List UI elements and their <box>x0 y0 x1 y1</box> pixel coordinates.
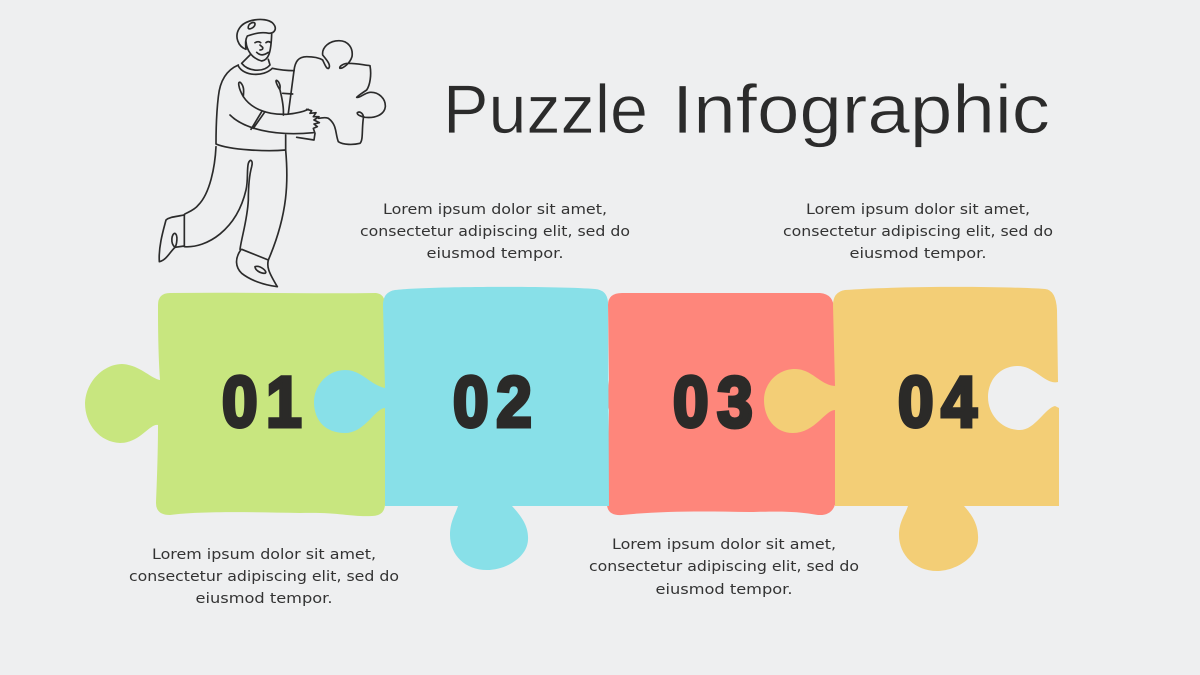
illustration: man holding puzzle piece <box>159 19 385 287</box>
puzzle strip <box>85 287 1059 571</box>
numbers <box>222 363 977 442</box>
number 04: 04 <box>898 363 977 442</box>
puzzle piece 2: blue <box>314 287 609 570</box>
number 02: 02 <box>453 363 532 442</box>
text block 4: Lorem ipsum dolor sit amet, <box>806 202 1030 218</box>
number 03: 03 <box>673 363 753 442</box>
puzzle piece 3: red <box>607 293 836 515</box>
puzzle piece 1: green <box>85 293 385 516</box>
title: Infographic <box>672 71 1050 148</box>
text block 4 <box>783 202 1053 262</box>
text block 3: consectetur adipiscing elit, sed do <box>589 559 859 575</box>
text block 2: eiusmod tempor. <box>426 246 564 262</box>
text block 4: consectetur adipiscing elit, sed do <box>783 224 1053 240</box>
text block 1: consectetur adipiscing elit, sed do <box>129 569 399 585</box>
puzzle piece 4: yellow <box>764 287 1059 571</box>
text block 4: eiusmod tempor. <box>850 246 986 262</box>
text block 2 <box>360 202 630 262</box>
text block 1 <box>129 547 399 607</box>
title <box>443 71 1050 148</box>
text block 3: Lorem ipsum dolor sit amet, <box>612 537 836 553</box>
text block 1: eiusmod tempor. <box>196 591 332 607</box>
text block 3 <box>589 537 859 598</box>
title: Puzzle <box>443 71 648 148</box>
text block 2: consectetur adipiscing elit, sed do <box>360 224 630 240</box>
number 01: 01 <box>222 363 302 442</box>
text block 1: Lorem ipsum dolor sit amet, <box>152 547 376 563</box>
text block 3: eiusmod tempor. <box>656 582 792 598</box>
text block 2: Lorem ipsum dolor sit amet, <box>383 202 607 218</box>
